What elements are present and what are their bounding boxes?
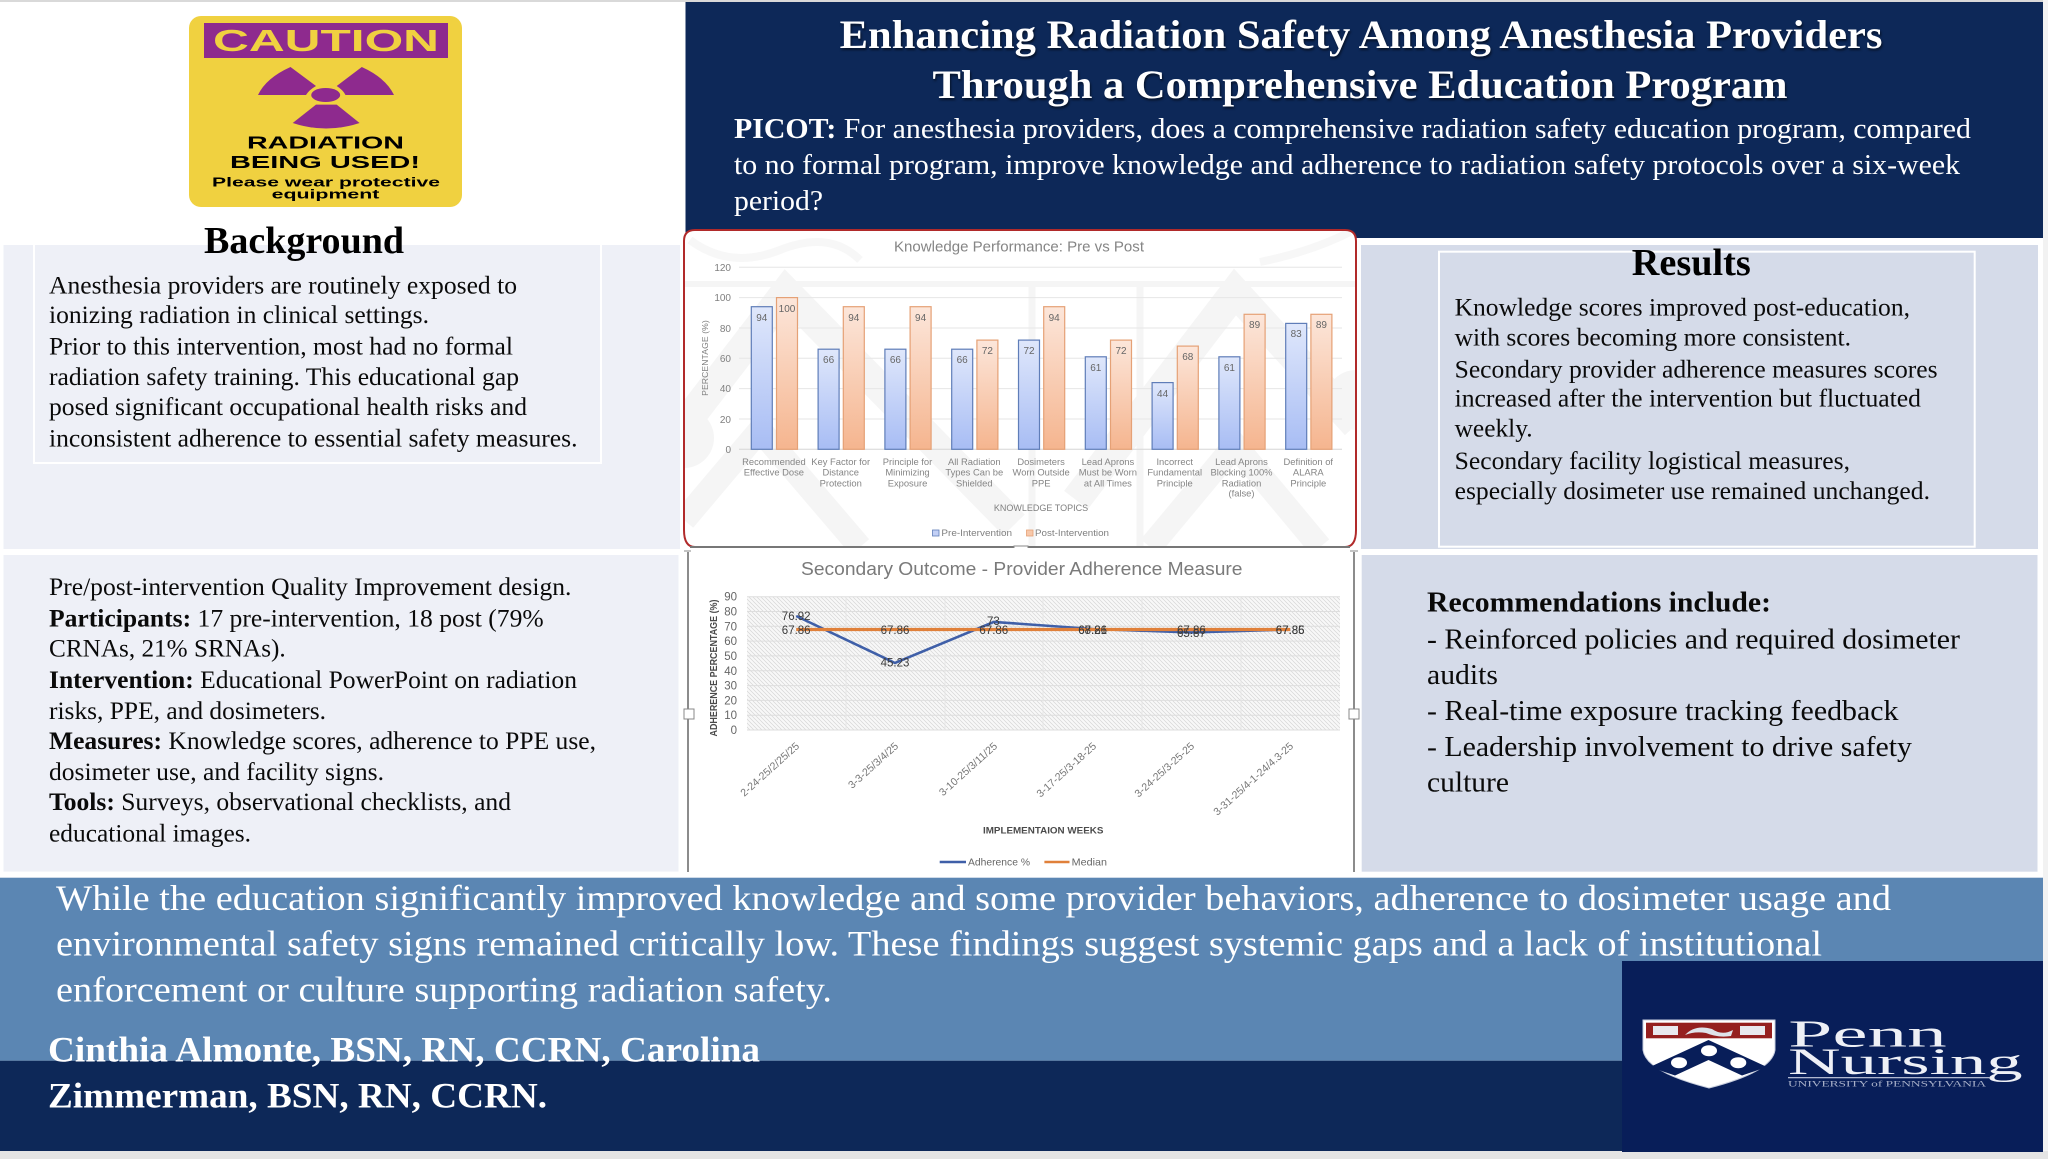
text block: methods body: risks, PPE, and dosimeters. <box>49 696 326 725</box>
icon: caution radiation sign: CAUTION <box>213 23 439 58</box>
category labels: Distance <box>822 467 859 478</box>
week labels: 3-10-25/3/11/25 <box>937 740 1000 799</box>
category labels: Exposure <box>888 478 927 489</box>
text block: methods body <box>49 572 596 848</box>
category labels: ALARA <box>1293 467 1324 478</box>
category labels: Worn Outside <box>1013 467 1070 478</box>
icon: caution radiation sign <box>189 16 462 207</box>
panel: conclusion band <box>0 878 2043 1151</box>
y axis <box>700 263 731 456</box>
panel: background <box>4 220 680 549</box>
bar value labels <box>756 304 1327 400</box>
panel: methods <box>4 555 678 872</box>
bar value labels: 94 <box>915 313 927 324</box>
text block: conclusion: enforcement or culture supporting radiation safety. <box>56 970 832 1010</box>
text block: results body: with scores becoming more consistent. <box>1455 323 1851 352</box>
category labels: Lead Aprons <box>1082 456 1135 467</box>
data labels: 67.86 <box>1177 625 1206 637</box>
text block: background body: inconsistent adherence to essential safety measures. <box>49 423 578 452</box>
text block: results body: increased after the intervention but fluctuated <box>1455 384 1921 413</box>
text block: results body: Knowledge scores improved post-education, <box>1455 293 1910 322</box>
x axis title: IMPLEMENTAION WEEKS <box>983 826 1104 837</box>
bar value labels: 72 <box>982 346 993 357</box>
bar value labels: 100 <box>779 304 796 315</box>
category labels: at All Times <box>1084 478 1132 489</box>
y axis: 10 <box>724 710 737 722</box>
chart title: Knowledge Performance: Pre vs Post <box>894 240 1144 256</box>
title: Through a Comprehensive Education Program <box>932 62 1788 107</box>
week labels <box>738 740 1296 818</box>
y axis: 20 <box>724 695 737 707</box>
panel: knowledge bar chart <box>654 230 1386 552</box>
text block: results body: Secondary provider adherence measures scores <box>1455 354 1938 383</box>
panel: results <box>1361 242 2038 549</box>
text block: authors <box>48 1030 760 1116</box>
data labels: 67.86 <box>881 625 909 637</box>
data labels: 67.85 <box>1276 625 1305 637</box>
text: Penn Nursing wordmark: Nursing <box>1788 1042 2023 1083</box>
text block: PICOT question: PICOT: For anesthesia providers, does a comprehensive radiation safety education program, compared <box>734 113 1972 145</box>
category labels: Incorrect <box>1156 456 1193 467</box>
category labels <box>742 456 1333 499</box>
panel: recommendations <box>1362 555 2038 872</box>
legend: Post-Intervention <box>1035 527 1109 538</box>
week labels: 3-3-25/3/4/25 <box>846 740 901 791</box>
bar value labels: 94 <box>756 313 768 324</box>
text block: background body: radiation safety training. This educational gap <box>49 362 519 391</box>
text: Penn Nursing wordmark: Penn <box>1788 1014 1947 1056</box>
category labels: Definition of <box>1284 456 1333 467</box>
bar value labels: 83 <box>1291 329 1302 340</box>
category labels: Dosimeters <box>1017 456 1065 467</box>
bar value labels: 66 <box>957 355 968 366</box>
category labels: Minimizing <box>885 467 930 478</box>
text block: results body <box>1455 293 1938 505</box>
y axis: 80 <box>720 324 731 335</box>
data labels: 45.23 <box>881 658 909 670</box>
text block: methods body: Intervention: Educational PowerPoint on radiation <box>49 665 577 694</box>
text block: results body: especially dosimeter use remained unchanged. <box>1455 476 1930 505</box>
category labels: Types Can be <box>945 467 1003 478</box>
category labels: PPE <box>1032 478 1050 489</box>
x axis title: KNOWLEDGE TOPICS <box>994 503 1088 513</box>
y axis: 90 <box>724 592 737 604</box>
y axis: 40 <box>720 384 731 395</box>
legend <box>940 857 1107 869</box>
text block: methods body: Pre/post-intervention Quality Improvement design. <box>49 572 571 601</box>
text block: background body: Anesthesia providers are routinely exposed to <box>49 271 517 300</box>
category labels: All Radiation <box>948 456 1001 467</box>
text block: recommendations: audits <box>1427 659 1498 691</box>
data labels: 65.87 <box>1177 628 1206 640</box>
bar value labels: 61 <box>1224 363 1235 374</box>
icon: caution radiation sign: Please wear protective <box>212 174 440 189</box>
y axis: 30 <box>724 681 737 693</box>
text block: recommendations: Recommendations include: <box>1427 587 1771 619</box>
data labels <box>782 611 1305 670</box>
bar value labels: 72 <box>1115 346 1127 357</box>
legend: Adherence % <box>968 857 1030 869</box>
category labels: Must be Worn <box>1079 467 1137 478</box>
data labels: 76.92 <box>782 611 811 623</box>
y axis: 100 <box>714 293 731 304</box>
data labels: 67.86 <box>1078 625 1107 637</box>
category labels: Lead Aprons <box>1215 456 1268 467</box>
data labels: 73 <box>987 616 1000 628</box>
text block: methods body: Tools: Surveys, observational checklists, and <box>49 787 511 816</box>
category labels: Shielded <box>956 478 993 489</box>
y axis: 120 <box>714 263 731 274</box>
category labels: Principle <box>1290 478 1326 489</box>
bar value labels: 66 <box>890 355 901 366</box>
panel: header <box>686 2 2043 238</box>
text block: background body: Prior to this intervention, most had no formal <box>49 332 513 361</box>
data labels: 67.86 <box>979 625 1008 637</box>
text block: PICOT question: period? <box>734 185 823 217</box>
category labels: Blocking 100% <box>1210 467 1273 478</box>
text block: PICOT question <box>734 113 1972 217</box>
text block: recommendations: - Reinforced policies and required dosimeter <box>1427 623 1960 655</box>
bar value labels: 94 <box>1049 313 1060 324</box>
bar value labels: 89 <box>1316 320 1327 331</box>
week labels: 3-17-25/3-18-25 <box>1035 740 1099 800</box>
bar value labels: 44 <box>1157 389 1169 400</box>
bar value labels: 89 <box>1249 320 1261 331</box>
y axis: 40 <box>724 666 737 678</box>
text block: recommendations: culture <box>1427 767 1509 799</box>
heading: background: Background <box>204 220 404 262</box>
week labels: 2-24-25/2/25/25 <box>738 740 802 799</box>
text block: authors: Cinthia Almonte, BSN, RN, CCRN, Carolina <box>48 1030 760 1070</box>
text block: conclusion <box>56 878 1891 1010</box>
y axis: 60 <box>724 636 737 648</box>
data labels: 67.86 <box>1276 625 1305 637</box>
text block: background body <box>49 271 578 452</box>
text block: conclusion: While the education significantly improved knowledge and some provider behaviors, adherence to dosimeter usage and <box>56 878 1891 918</box>
title <box>840 12 1883 107</box>
y axis: 50 <box>724 651 737 663</box>
category labels: Key Factor for <box>811 456 870 467</box>
bar value labels: 72 <box>1023 346 1035 357</box>
y axis <box>724 592 737 737</box>
legend: Median <box>1072 857 1107 869</box>
bar value labels: 61 <box>1090 363 1102 374</box>
y axis: PERCENTAGE (%) <box>700 320 710 396</box>
category labels: Principle for <box>883 456 932 467</box>
pre-intervention bars <box>751 307 1307 449</box>
text block: methods body: CRNAs, 21% SRNAs). <box>49 634 286 663</box>
text block: background body: posed significant occupational health risks and <box>49 392 527 421</box>
icon: caution radiation sign: RADIATION <box>247 133 404 153</box>
data labels: 68.21 <box>1078 625 1107 637</box>
text block: results body: weekly. <box>1455 414 1533 443</box>
panel: adherence line chart: ADHERENCE PERCENTAGE (%) <box>709 600 720 736</box>
line: median <box>796 628 1290 631</box>
data labels: 67.86 <box>782 625 811 637</box>
y axis: 60 <box>720 354 731 365</box>
panel: Penn Nursing logo <box>1622 961 2043 1152</box>
text block: methods body: Participants: 17 pre-intervention, 18 post (79% <box>49 604 544 633</box>
category labels: Effective Dose <box>744 467 804 478</box>
plot area <box>747 597 1340 730</box>
line: adherence <box>796 616 1290 663</box>
heading: results: Results <box>1632 242 1751 284</box>
text block: PICOT question: to no formal program, improve knowledge and adherence to radiation safety protocols over a six-week <box>734 149 1961 181</box>
text block: recommendations: - Leadership involvement to drive safety <box>1427 731 1912 763</box>
text block: methods body: educational images. <box>49 819 251 848</box>
text block: recommendations: - Real-time exposure tracking feedback <box>1427 695 1899 727</box>
text: Penn Nursing wordmark <box>1788 1014 2023 1089</box>
week labels: 3-24-25/3-25-25 <box>1133 740 1197 800</box>
text block: results body: Secondary facility logistical measures, <box>1455 446 1850 475</box>
legend <box>932 527 1109 538</box>
chart title: Secondary Outcome - Provider Adherence Measure <box>801 559 1242 579</box>
category labels: Protection <box>820 478 862 489</box>
y axis: 20 <box>720 415 731 426</box>
y axis: 0 <box>725 445 731 456</box>
bar value labels: 68 <box>1182 352 1194 363</box>
category labels: Principle <box>1157 478 1193 489</box>
category labels: (false) <box>1228 488 1255 499</box>
category labels: Fundamental <box>1147 467 1202 478</box>
text block: recommendations <box>1427 587 1960 799</box>
icon: caution radiation sign: equipment <box>272 187 380 202</box>
icon: Penn shield <box>1643 1020 1775 1088</box>
bar value labels: 94 <box>848 313 860 324</box>
week labels: 3-31-25/4-1-24/4.3-25 <box>1211 740 1296 818</box>
text block: methods body: dosimeter use, and facility signs. <box>49 757 384 786</box>
post-intervention bars <box>776 298 1332 449</box>
legend: Pre-Intervention <box>941 527 1012 538</box>
title: Enhancing Radiation Safety Among Anesthesia Providers <box>840 12 1883 57</box>
text: Penn Nursing wordmark: UNIVERSITY of PENNSYLVANIA <box>1788 1080 1986 1089</box>
text block: methods body: Measures: Knowledge scores, adherence to PPE use, <box>49 726 596 755</box>
bar value labels: 66 <box>823 355 835 366</box>
text block: authors: Zimmerman, BSN, RN, CCRN. <box>48 1076 547 1116</box>
y axis: 0 <box>731 725 737 737</box>
icon: caution radiation sign: BEING USED! <box>230 152 420 172</box>
panel: adherence line chart <box>684 548 1359 872</box>
y axis: 80 <box>724 606 737 618</box>
y axis: 70 <box>724 621 737 633</box>
text block: background body: ionizing radiation in clinical settings. <box>49 300 429 329</box>
category labels: Recommended <box>742 456 806 467</box>
text block: conclusion: environmental safety signs remained critically low. These findings suggest systemic gaps and a lack of institutional <box>56 924 1822 964</box>
category labels: Radiation <box>1222 478 1261 489</box>
